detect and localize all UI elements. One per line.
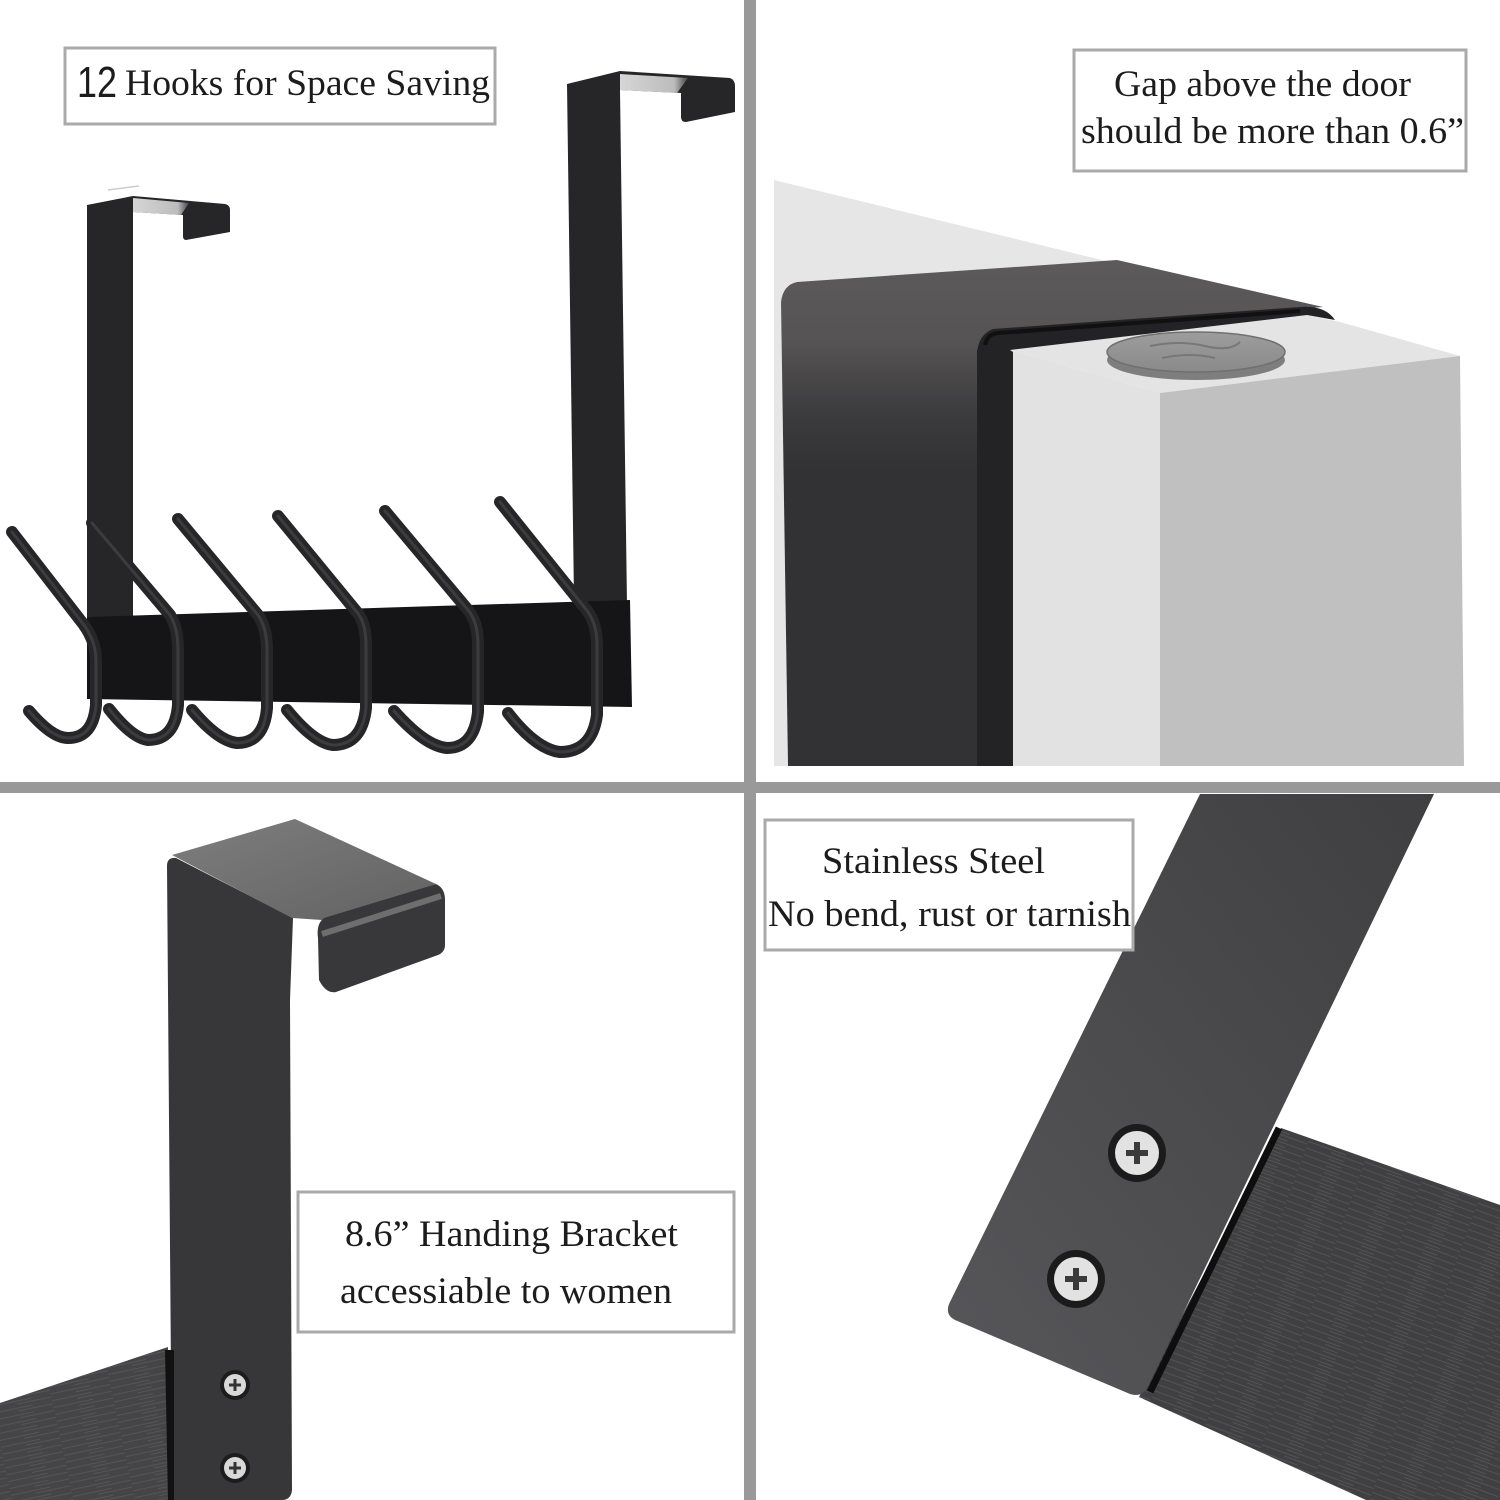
bracket top plate: [172, 819, 436, 920]
callout: hanging bracket: [298, 1192, 734, 1332]
bracket plate: [948, 794, 1434, 1395]
callout: 12 hooks: Hooks for Space Saving: [125, 63, 490, 104]
callout: stainless steel: Stainless Steel: [822, 841, 1045, 882]
crossbar brushed: [1139, 1128, 1500, 1500]
callout: gap above door: [1074, 50, 1466, 171]
panel: stainless steel close-up: [948, 794, 1500, 1500]
bracket wrap: [781, 260, 1323, 766]
callout: 12 hooks: [65, 48, 495, 124]
panel: hanging bracket: [0, 819, 445, 1500]
door side face: [1160, 356, 1464, 766]
bracket hook lip: [318, 884, 445, 992]
panel: twelve hooks product: [12, 71, 735, 752]
bracket inner edge: [977, 307, 1335, 766]
coin: [1107, 332, 1285, 380]
crossbar: [0, 1347, 168, 1500]
icon: tall bracket: [567, 71, 735, 705]
icon: screws: [1047, 1124, 1166, 1308]
grid dividers: [744, 0, 756, 1500]
callout: hanging bracket: 8.6” Handing Bracket: [345, 1214, 679, 1255]
bracket long arm: [167, 858, 293, 1500]
door top surface: [1010, 315, 1460, 393]
callout: 12 hooks: 12: [77, 58, 117, 107]
callout: hanging bracket: accessiable to women: [340, 1271, 672, 1312]
panel: door gap close-up: [774, 180, 1464, 766]
icon: six hooks: [12, 502, 597, 752]
callout: gap above door: should be more than 0.6”: [1081, 111, 1464, 152]
icon: crossbar: [87, 600, 632, 707]
icon: screws: [220, 1370, 250, 1483]
door front face: [1010, 350, 1160, 766]
icon: short bracket: [87, 186, 230, 620]
door behind bracket: [774, 180, 1110, 766]
callout: stainless steel: [765, 820, 1133, 950]
callout: stainless steel: No bend, rust or tarnish: [768, 894, 1132, 935]
callout: gap above door: Gap above the door: [1114, 64, 1411, 105]
